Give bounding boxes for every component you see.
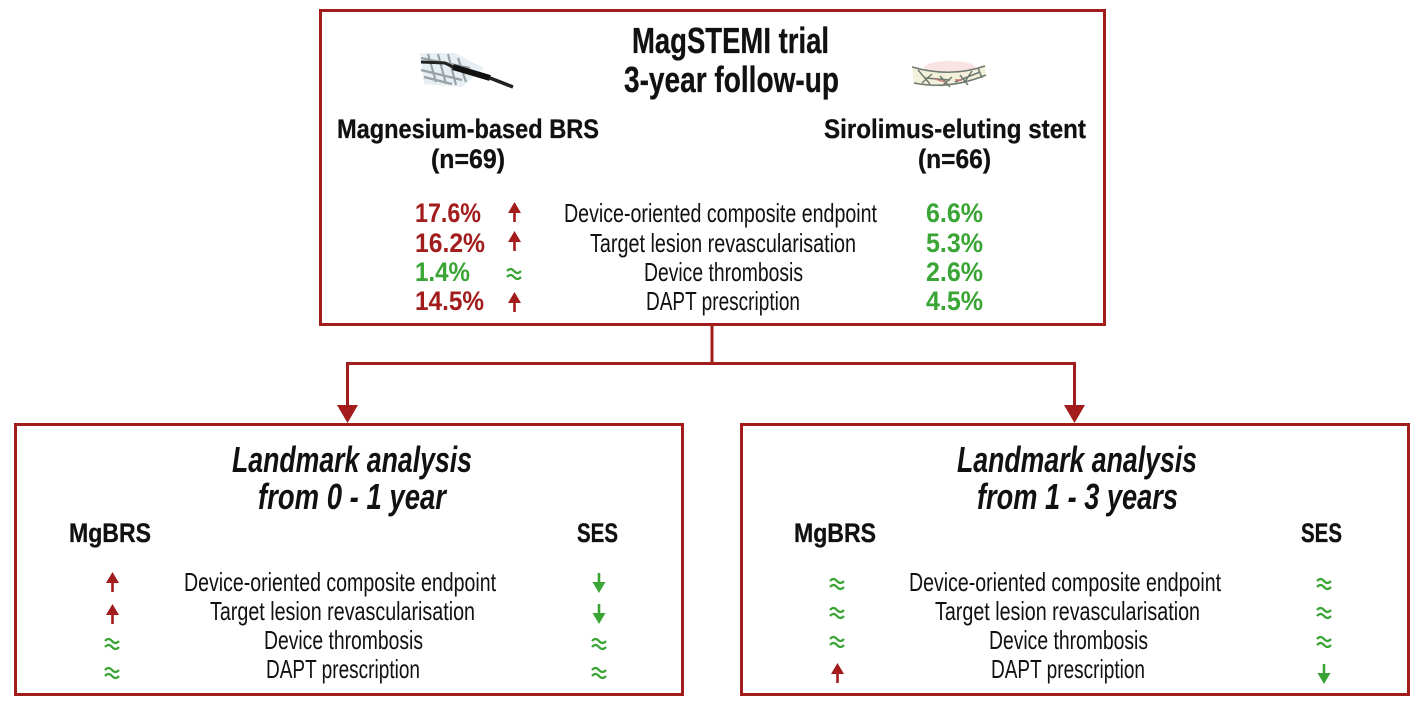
row: DAPT prescription: [105, 654, 606, 684]
results row: device thrombosis: 1.4%: [415, 257, 470, 287]
heading: sirolimus-eluting stent arm: [824, 114, 1086, 174]
row: target lesion revascularisation: Target lesion revascularisation: [210, 596, 475, 626]
row: device-oriented composite endpoint: Device-oriented composite endpoint: [184, 567, 497, 597]
heading: landmark 1-3 years: from 1 - 3 years: [977, 476, 1178, 517]
heading: sirolimus-eluting stent arm: Sirolimus-eluting stent: [824, 114, 1086, 144]
results row: DAPT prescription: 4.5%: [926, 286, 983, 316]
row: DAPT prescription: [831, 654, 1330, 684]
heading: landmark 1-3 years: Landmark analysis: [957, 439, 1197, 480]
row: device thrombosis: [830, 625, 1331, 655]
row: target lesion revascularisation: [830, 596, 1331, 626]
results row: DAPT prescription: [415, 286, 983, 316]
row: device-oriented composite endpoint: Device-oriented composite endpoint: [909, 567, 1222, 597]
row: device thrombosis: [105, 625, 606, 655]
results row: device thrombosis: 2.6%: [926, 257, 983, 287]
results row: target lesion revascularisation: Target lesion revascularisation: [590, 228, 856, 258]
results row: device thrombosis: Device thrombosis: [644, 257, 803, 287]
column label: MgBRS: MgBRS: [69, 518, 151, 548]
heading: magnesium-based BRS arm: [337, 114, 599, 174]
icon: sirolimus-eluting stent: [912, 61, 986, 87]
results row: device-oriented composite endpoint: 17.6%: [415, 198, 481, 228]
row: target lesion revascularisation: Target lesion revascularisation: [935, 596, 1200, 626]
arrow: split to landmark analyses: [337, 325, 1085, 423]
panel: landmark analysis 1-3 years: [742, 424, 1408, 694]
results row: device thrombosis: [415, 257, 983, 287]
heading: magnesium-based BRS arm: Magnesium-based BRS: [337, 114, 599, 144]
panel: landmark analysis 0-1 year: [16, 424, 682, 694]
results row: device-oriented composite endpoint: 6.6%: [926, 198, 983, 228]
row: device thrombosis: Device thrombosis: [989, 625, 1148, 655]
results row: target lesion revascularisation: 16.2%: [415, 228, 485, 258]
heading: landmark 0-1 year: Landmark analysis: [232, 439, 472, 480]
heading: magnesium-based BRS arm: (n=69): [431, 144, 505, 174]
column label: SES: SES: [577, 518, 618, 548]
results row: target lesion revascularisation: [415, 228, 983, 258]
row: DAPT prescription: DAPT prescription: [991, 654, 1145, 684]
heading: landmark 0-1 year: [232, 439, 472, 517]
column label: MgBRS: MgBRS: [794, 518, 876, 548]
panel: MagSTEMI trial overview: [320, 10, 1104, 324]
title: MagSTEMI trial: [632, 20, 829, 61]
heading: landmark 0-1 year: from 0 - 1 year: [258, 476, 448, 517]
results row: device-oriented composite endpoint: Device-oriented composite endpoint: [564, 198, 878, 228]
column label: SES: SES: [1301, 518, 1342, 548]
results row: target lesion revascularisation: 5.3%: [926, 228, 983, 258]
heading: sirolimus-eluting stent arm: (n=66): [918, 144, 991, 174]
title: 3-year follow-up: [624, 59, 839, 100]
heading: landmark 1-3 years: [957, 439, 1197, 517]
results row: DAPT prescription: DAPT prescription: [646, 286, 800, 316]
row: device thrombosis: Device thrombosis: [264, 625, 423, 655]
results row: DAPT prescription: 14.5%: [415, 286, 484, 316]
row: DAPT prescription: DAPT prescription: [266, 654, 420, 684]
title: [624, 20, 839, 100]
icon: magnesium-based scaffold on balloon catheter: [420, 53, 513, 87]
